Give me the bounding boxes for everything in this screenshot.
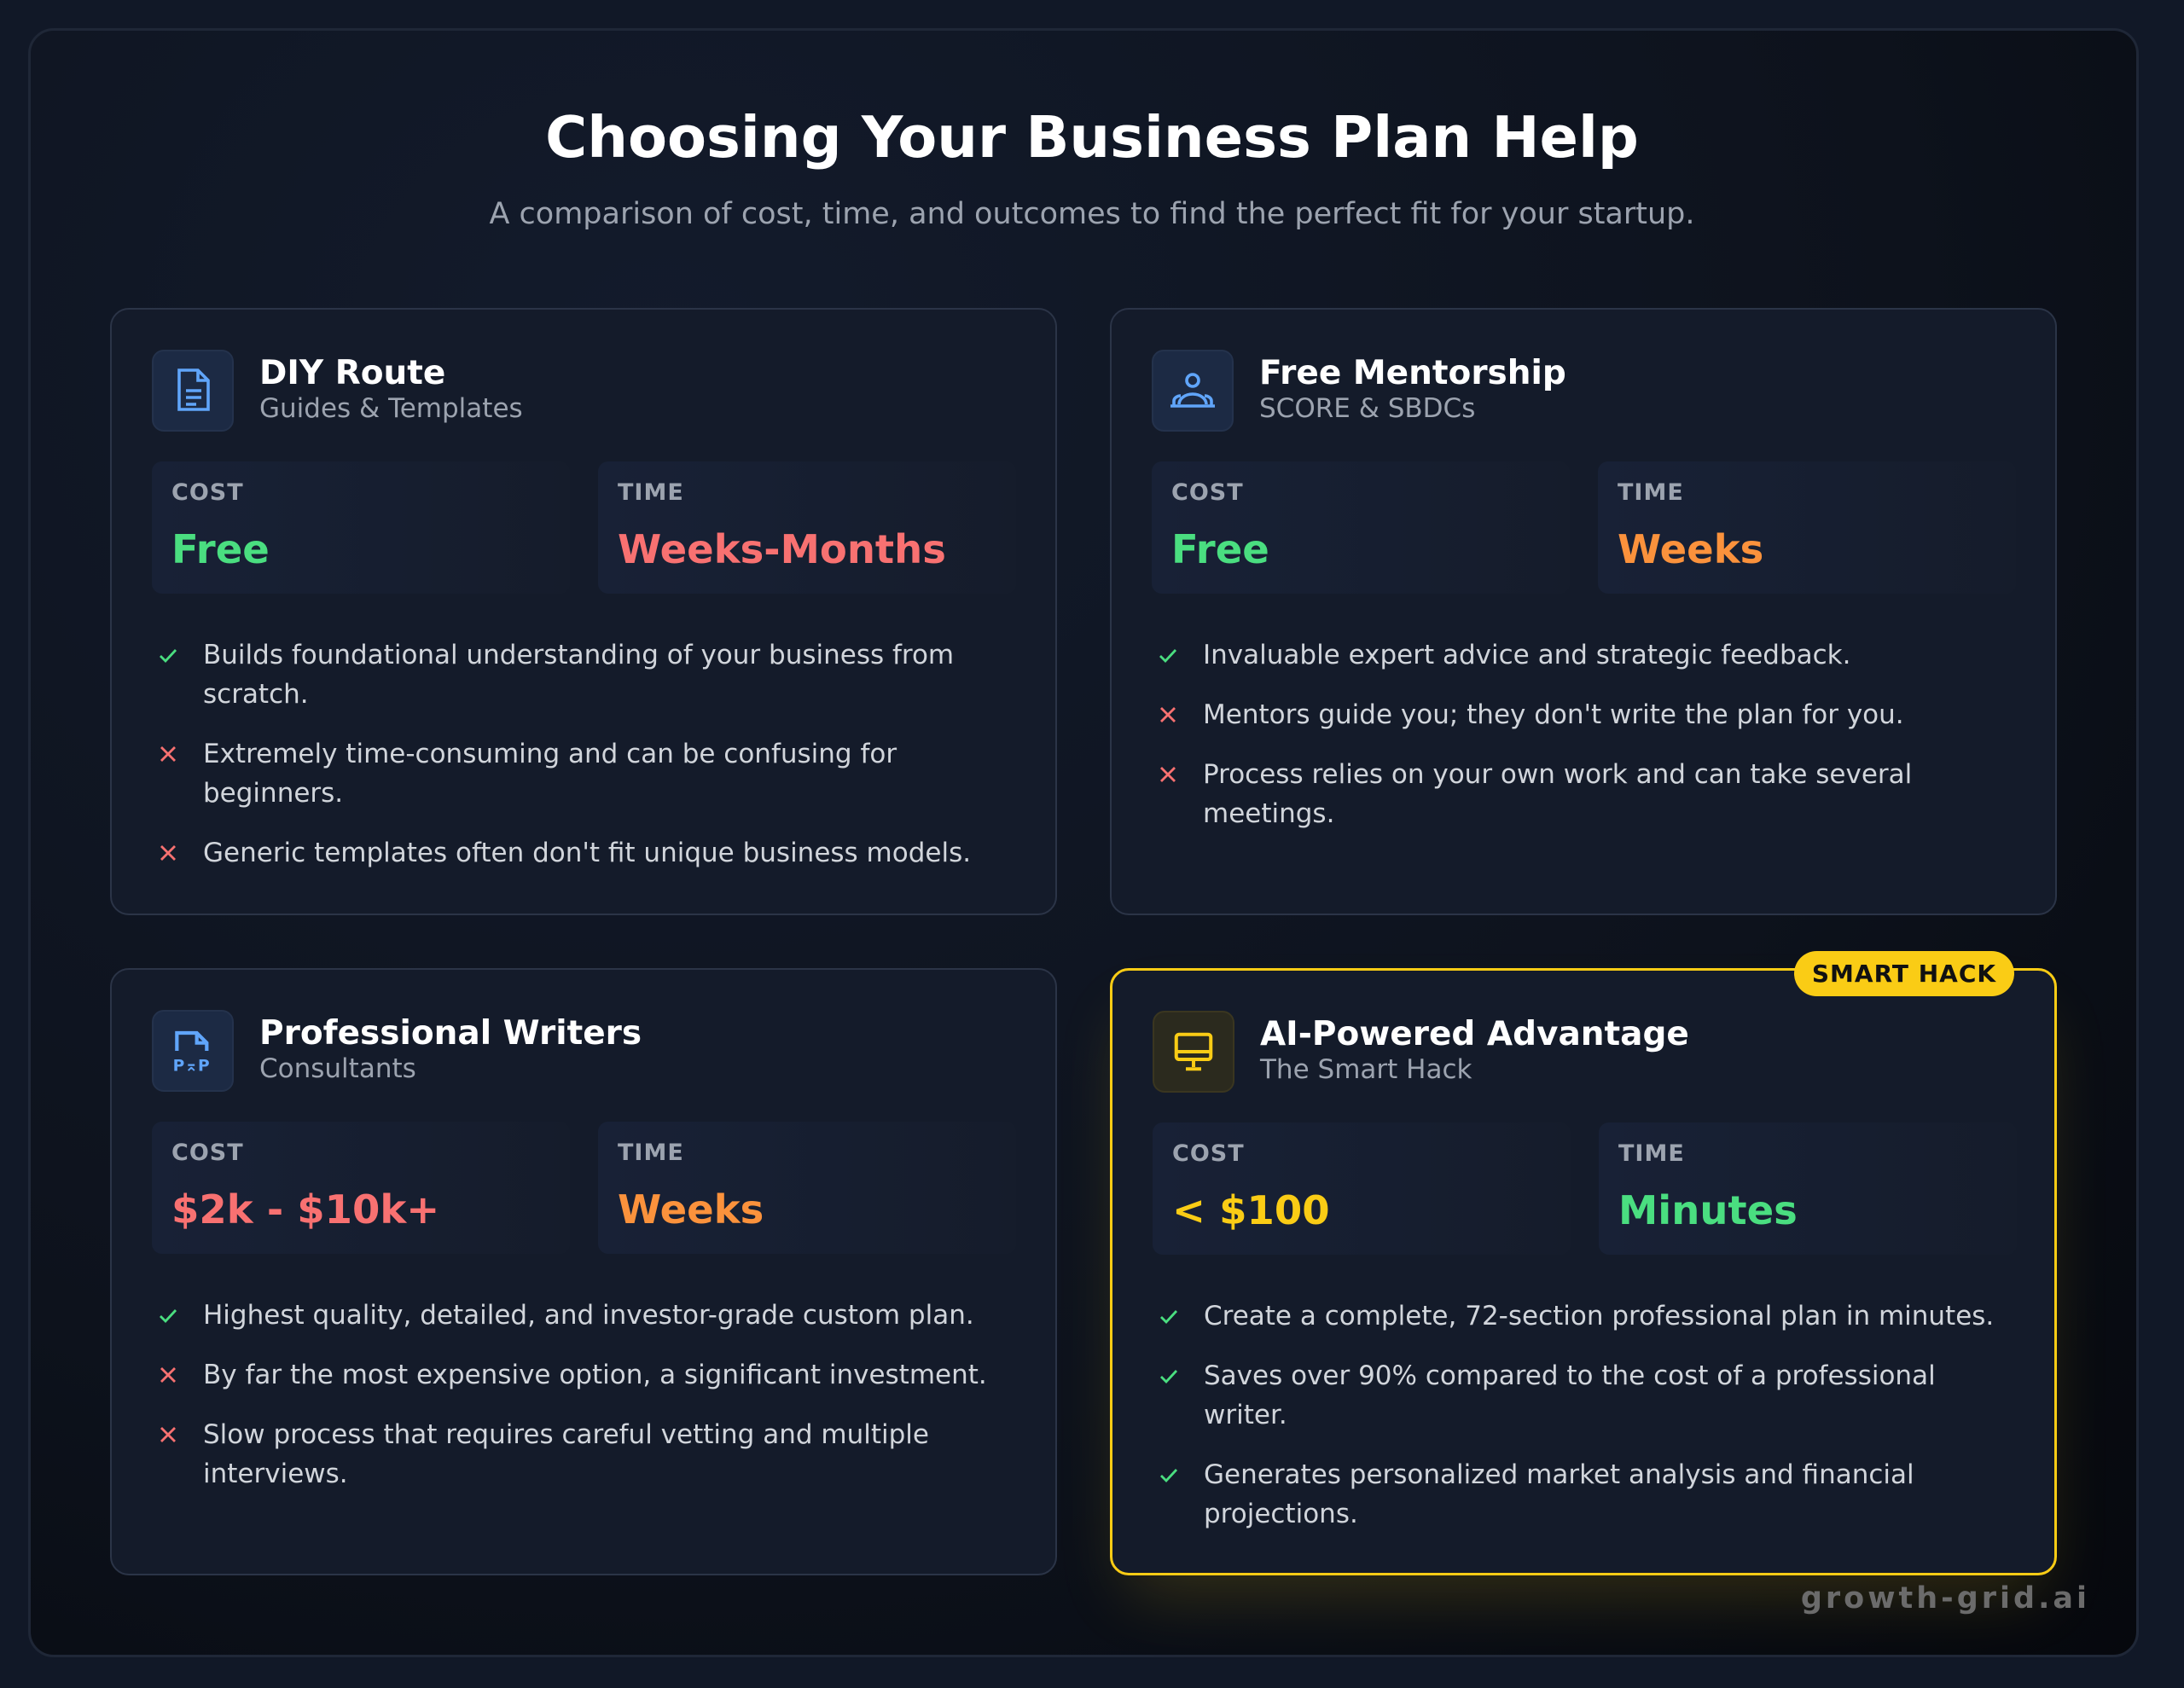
stat: cost: Free <box>1171 526 1269 572</box>
bullets: Highest quality, detailed, and investor-grade custom plan. <box>203 1300 974 1331</box>
panel: Free Mentorship: SCORE & SBDCs <box>1259 393 1475 424</box>
stat: cost: $2k - $10k+ <box>171 1186 439 1233</box>
stat: cost: COST <box>1171 479 1244 506</box>
stat: time: TIME <box>1618 479 1684 506</box>
watermark: growth-grid.ai <box>1801 1581 2090 1615</box>
stat: cost: < $100 <box>1172 1187 1330 1233</box>
badge: smart hack: SMART HACK <box>1812 960 1996 988</box>
stat: time: TIME <box>618 479 684 506</box>
icon: pen document: P⌅P <box>173 1057 210 1075</box>
subtitle: A comparison of cost, time, and outcomes to find the perfect fit for your startup. <box>489 197 1695 231</box>
heading: Free Mentorship <box>1259 354 1566 392</box>
stat: cost <box>1153 1122 1571 1255</box>
bullets: Process relies on your own work and can take several meetings. <box>1203 759 1912 829</box>
heading: Professional Writers <box>259 1014 642 1053</box>
heading: AI-Powered Advantage <box>1260 1015 1689 1053</box>
bullets: Create a complete, 72-section professional plan in minutes. <box>1204 1301 1994 1331</box>
stat: cost <box>152 1122 570 1254</box>
bullets: Slow process that requires careful vetting and multiple interviews. <box>203 1419 929 1489</box>
stat: cost: COST <box>171 1140 244 1166</box>
panel: Professional Writers <box>110 968 1057 1575</box>
bullets: Generates personalized market analysis and financial projections. <box>1204 1459 1914 1529</box>
stat: cost: Free <box>171 526 270 572</box>
bullets: Saves over 90% compared to the cost of a professional writer. <box>1204 1360 1936 1430</box>
panel: DIY Route: Guides & Templates <box>259 393 523 424</box>
stat: time <box>598 1122 1016 1254</box>
stat: time <box>598 461 1016 594</box>
bullets: Extremely time-consuming and can be confusing for beginners. <box>203 739 897 809</box>
stat: time: Weeks <box>1618 526 1763 572</box>
stat: time: Weeks-Months <box>618 526 946 572</box>
bullets <box>1159 640 1912 829</box>
stat: time: Minutes <box>1618 1187 1798 1233</box>
stat: time: TIME <box>618 1140 684 1166</box>
bullets <box>160 1300 987 1489</box>
stat: cost: COST <box>171 479 244 506</box>
stat: cost: COST <box>1172 1140 1245 1167</box>
stat: cost <box>152 461 570 594</box>
bullets <box>160 640 971 868</box>
panel: Free Mentorship <box>1110 308 2057 915</box>
stat: time <box>1598 461 2016 594</box>
bullets <box>1160 1301 1994 1529</box>
badge: smart hack <box>1794 951 2014 996</box>
bullets: By far the most expensive option, a significant investment. <box>203 1360 987 1390</box>
icon: pen document <box>152 1010 234 1092</box>
bullets: Builds foundational understanding of your business from scratch. <box>203 640 954 710</box>
stat: time <box>1599 1122 2017 1255</box>
title: Choosing Your Business Plan Help <box>545 104 1639 171</box>
bullets: Mentors guide you; they don't write the plan for you. <box>1203 699 1904 730</box>
icon: monitor <box>1153 1011 1234 1093</box>
panel: Professional Writers: Consultants <box>259 1053 416 1084</box>
stat: time: Weeks <box>618 1186 764 1233</box>
icon: document <box>152 350 234 432</box>
stat: cost <box>1152 461 1570 594</box>
bullets: Generic templates often don't fit unique business models. <box>203 838 971 868</box>
panel: DIY Route <box>110 308 1057 915</box>
icon: mentor <box>1152 350 1234 432</box>
panel: AI-Powered Advantage <box>1110 968 2057 1575</box>
panel: AI-Powered Advantage: The Smart Hack <box>1260 1054 1472 1085</box>
stat: time: TIME <box>1618 1140 1685 1167</box>
bullets: Invaluable expert advice and strategic feedback. <box>1203 640 1851 670</box>
heading: DIY Route <box>259 354 445 392</box>
